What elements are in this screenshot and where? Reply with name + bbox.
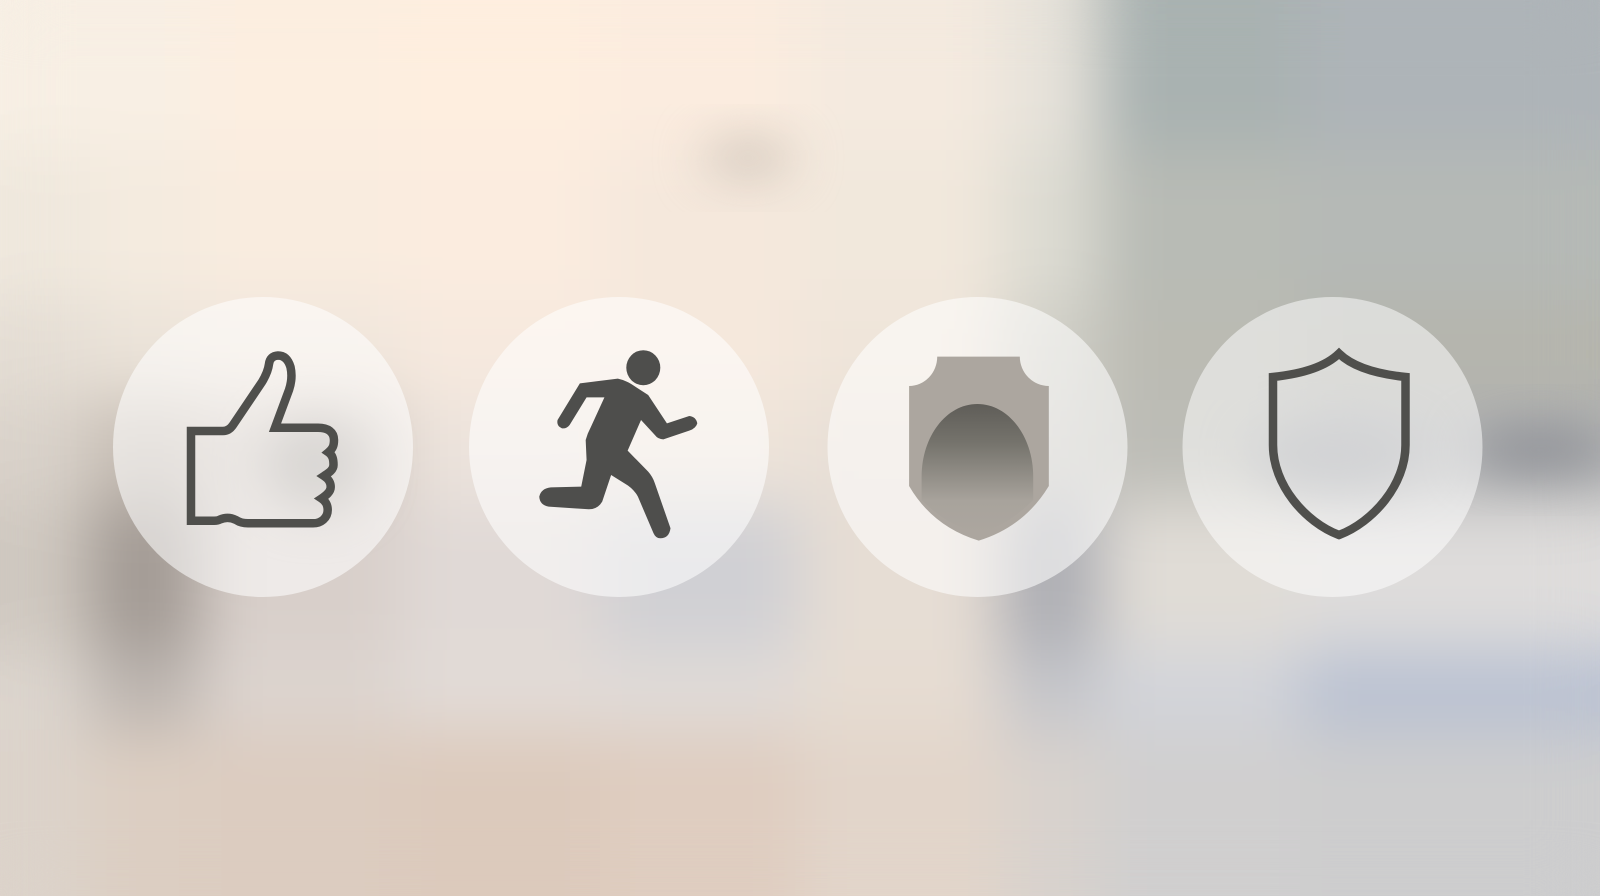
icon: thumbs up	[191, 356, 334, 523]
circle: thumbs up badge	[113, 297, 413, 597]
circle: outline shield badge	[1182, 297, 1482, 597]
circle: filled shield badge	[828, 297, 1128, 597]
icon: running person	[539, 350, 697, 538]
icon: outline shield	[1273, 354, 1406, 535]
dark smudge behind outline shield badge	[1250, 423, 1420, 487]
dark smudge behind thumb badge	[265, 420, 365, 510]
dark smudge near top centre	[702, 140, 794, 176]
dark smudge at right edge	[1470, 428, 1600, 472]
circle: running figure badge	[469, 297, 769, 597]
icon: filled shield with arch	[909, 357, 1049, 541]
